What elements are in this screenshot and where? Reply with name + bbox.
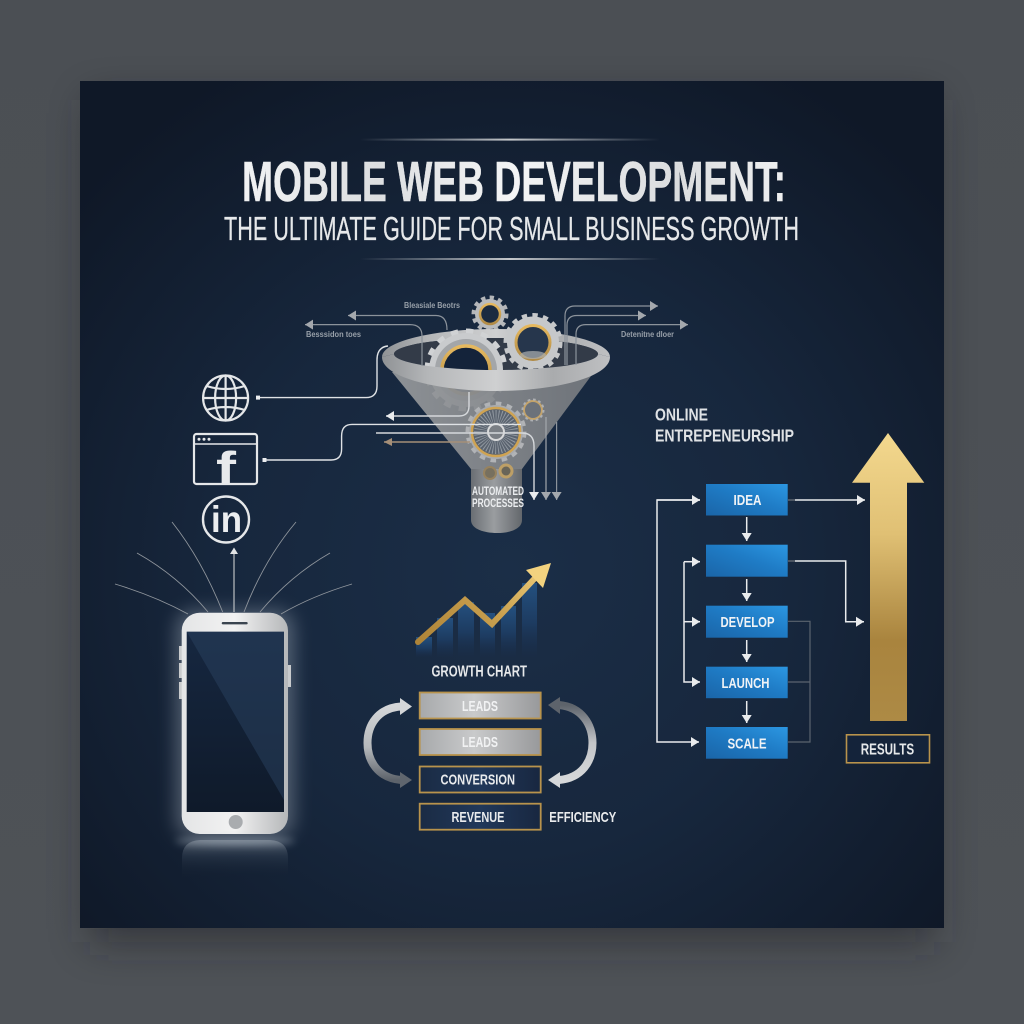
- step: scale: [706, 727, 788, 759]
- small funnel captions: [306, 300, 675, 339]
- funnel opening: [394, 338, 598, 370]
- gold growth arrow: [852, 433, 924, 721]
- cycle arrow left: [368, 698, 412, 788]
- step: develop: DEVELOP: [720, 614, 774, 631]
- label: efficiency: EFFICIENCY: [549, 809, 616, 826]
- chart bars: [416, 583, 537, 657]
- heading: online entrepreneurship: [655, 405, 794, 446]
- heading: online entrepreneurship: ONLINE: [655, 405, 708, 425]
- phone glow: [176, 610, 294, 838]
- phone screen: [187, 632, 284, 812]
- label: automated processes: AUTOMATED: [472, 486, 524, 498]
- step: launch: LAUNCH: [722, 675, 770, 692]
- funnel output arrows: [305, 306, 688, 500]
- box: leads 1: [420, 692, 541, 718]
- icon: linkedin: in: [211, 499, 242, 540]
- title block: [224, 139, 799, 260]
- medium gear: [507, 316, 559, 368]
- box: leads 2: LEADS: [462, 734, 498, 751]
- icon: browser with f: f: [216, 442, 237, 494]
- phone reflection: [182, 840, 288, 880]
- small upper gear: [474, 298, 506, 330]
- signal rays: [115, 522, 352, 614]
- large gear: [429, 333, 503, 407]
- floor glow: [175, 838, 295, 844]
- results box: RESULTS: [861, 742, 914, 759]
- phone body: [182, 613, 288, 834]
- box: conversion: [420, 766, 541, 792]
- funnel cone: [392, 372, 594, 469]
- small side gear: [522, 400, 544, 420]
- step: scale: SCALE: [728, 736, 766, 752]
- chart label: GROWTH CHART: [432, 664, 527, 680]
- gray feedback connectors: [788, 621, 810, 742]
- results box: [846, 735, 930, 763]
- flow arrows: [657, 500, 865, 742]
- home button: [229, 815, 243, 829]
- box: revenue: [420, 804, 541, 830]
- icon: linkedin: [203, 496, 249, 542]
- growth chart: [416, 563, 551, 680]
- funnel neck: [471, 469, 522, 533]
- trend arrow: [418, 563, 551, 642]
- heading: online entrepreneurship: ENTREPENEURSHIP: [655, 426, 794, 446]
- step: idea: IDEA: [734, 492, 762, 509]
- phone with signal lines: [115, 522, 352, 880]
- inner gear: [469, 405, 523, 459]
- icon: globe: [203, 376, 248, 420]
- box: leads 1: LEADS: [462, 698, 498, 715]
- small funnel captions: Besssidon toes: [306, 329, 361, 339]
- tiny gears: [484, 465, 512, 479]
- flowchart: [657, 484, 865, 759]
- panel: dark navy background: [80, 81, 944, 928]
- box: leads 2: [420, 729, 541, 755]
- label: automated processes: PROCESSES: [472, 498, 524, 510]
- label: automated processes: [472, 486, 524, 510]
- connector: browser to funnel: [262, 424, 521, 462]
- funnel front rim: [382, 354, 610, 391]
- step: develop: [706, 606, 788, 638]
- box: revenue: REVENUE: [452, 809, 504, 826]
- speaker: [222, 622, 248, 624]
- funnel back rim: [382, 329, 610, 357]
- small funnel captions: Detenitne dloer: [621, 329, 675, 339]
- cycle arrow right: [548, 697, 592, 788]
- small funnel captions: Bleasiale Beotrs: [404, 300, 460, 310]
- step: idea: [706, 484, 788, 516]
- step: blank: [706, 545, 788, 577]
- connector: globe to funnel: [256, 346, 388, 400]
- box: conversion: CONVERSION: [440, 772, 515, 789]
- phone buttons: [179, 646, 291, 699]
- funnel with gears: [382, 298, 610, 533]
- step: launch: [706, 667, 788, 698]
- icon: browser with f: [194, 434, 257, 494]
- funnel stage boxes: [420, 692, 616, 830]
